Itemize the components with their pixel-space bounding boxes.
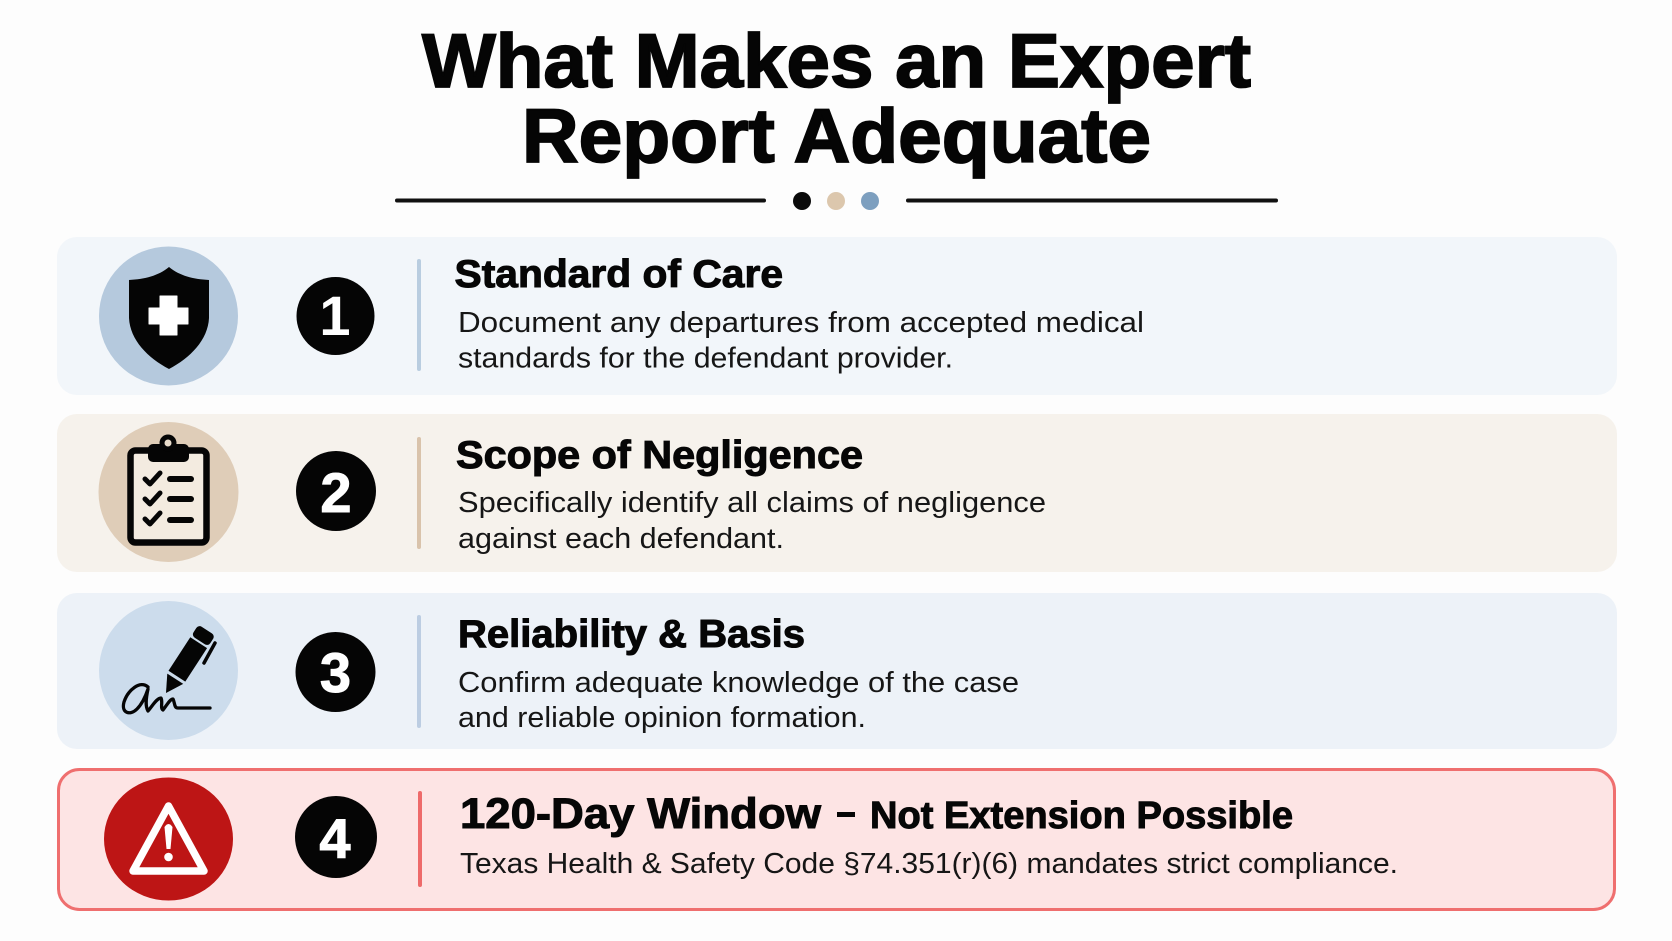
heading: standard of care: Standard of Care (454, 253, 783, 296)
heading: 120-day window, not extension possible: 120-Day Window (460, 790, 822, 838)
title divider with three dots (395, 192, 1278, 210)
vertical divider (418, 791, 422, 887)
number badge 2: 2 (320, 461, 352, 524)
vertical divider (417, 259, 421, 371)
description: standard of care: standards for the defendant provider. (458, 342, 953, 374)
panel: reliability and basis (57, 593, 1617, 749)
heading: 120-day window, not extension possible: Not Extension Possible (870, 795, 1293, 837)
icon: warning triangle (104, 778, 233, 900)
title: Report Adequate (522, 94, 1151, 179)
description: reliability and basis: Confirm adequate knowledge of the case (458, 667, 1019, 699)
icon: shield with cross (99, 246, 238, 386)
heading: scope of negligence: Scope of Negligence (456, 434, 863, 477)
panel: 120-day window warning (58, 770, 1614, 910)
title: What Makes an Expert (422, 19, 1251, 104)
number badge 3: 3 (320, 641, 351, 704)
number badge 3 (296, 632, 376, 712)
title (422, 19, 1251, 179)
heading: 120-day window, not extension possible (460, 790, 1293, 838)
number badge 4: 4 (319, 807, 351, 870)
vertical divider (417, 615, 421, 728)
description: standard of care (458, 307, 1144, 374)
description: scope of negligence: against each defendant. (458, 523, 784, 555)
number badge 4 (295, 796, 377, 878)
heading: reliability and basis: Reliability & Basis (458, 613, 805, 656)
icon: pen and signature (99, 601, 238, 740)
description: standard of care: Document any departures from accepted medical (458, 307, 1144, 339)
icon: clipboard checklist (98, 422, 238, 562)
description: texas code: Texas Health & Safety Code §74.351(r)(6) mandates strict compliance. (460, 848, 1398, 880)
number badge 1 (296, 277, 374, 355)
panel: standard of care (57, 237, 1617, 395)
description: reliability and basis (458, 667, 1019, 734)
description: reliability and basis: and reliable opinion formation. (458, 702, 866, 734)
panel: scope of negligence (57, 414, 1617, 572)
number badge 1: 1 (319, 284, 351, 347)
description: scope of negligence: Specifically identify all claims of negligence (458, 487, 1046, 519)
vertical divider (417, 437, 421, 549)
number badge 2 (296, 451, 376, 531)
description: scope of negligence (458, 487, 1046, 555)
